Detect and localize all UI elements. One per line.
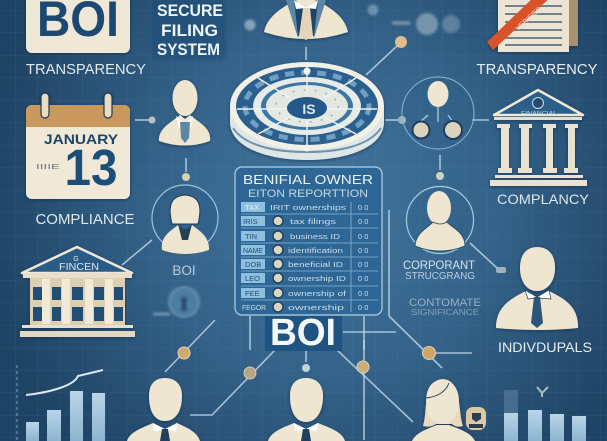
label: transparency left: TRANSPARENCY: [26, 61, 146, 78]
table: report rows: ownership: [288, 303, 344, 312]
icon: individual person: [496, 247, 578, 330]
icon: faded small dot top: [244, 20, 256, 30]
table: report rows: 0 0: [358, 217, 368, 226]
table: report rows: NAME: [243, 246, 263, 255]
icon: connector dot left: [148, 116, 156, 124]
icon: connector dot upper right: [436, 172, 444, 180]
label: transparency right: TRANSPARENCY: [476, 61, 598, 78]
icon: person in circle: [406, 186, 474, 254]
heading: secure filing system: [152, 0, 226, 60]
table: report rows: 0 0: [358, 232, 368, 241]
icon: faded shield top: [368, 4, 378, 16]
label: BOI small: BOI: [172, 263, 196, 278]
icon: calendar January 13: [26, 93, 130, 199]
label: individuals: INDIVDUPALS: [498, 339, 592, 355]
label: BOI large: BOI: [270, 312, 336, 354]
icon: person bottom left: [127, 378, 200, 441]
icon: FinCEN building: [20, 247, 135, 337]
icon: person bottom centre: [268, 378, 345, 441]
icon: faded lock: [153, 287, 199, 317]
table: report rows: [241, 202, 378, 312]
icon: FinCEN building: FINCEN: [59, 261, 99, 273]
label: faded corporate: CONTOMATE: [409, 297, 481, 309]
heading: secure filing system: SECURE: [157, 2, 223, 20]
label: compliance left: COMPLIANCE: [36, 212, 135, 228]
table: report rows: 0 0: [358, 289, 368, 298]
heading: reporting: EITON REPORTTION: [248, 188, 368, 200]
icon: tan node bottom right: [357, 361, 369, 373]
table: report rows: identification: [288, 246, 343, 255]
table: report rows: TIN: [245, 232, 257, 241]
panel: beneficial owner report: [235, 167, 382, 315]
icon: corporate ownership circle: [402, 77, 474, 149]
table: report rows: LEO: [245, 274, 260, 283]
icon: connector dot upper middle left: [182, 173, 190, 181]
icon: bank building right: FINANCIAL: [521, 111, 557, 117]
table: report rows: ownership of: [288, 289, 347, 298]
table: report rows: 0 0: [358, 246, 368, 255]
label: corporate structure: STRUCGRANG: [405, 271, 475, 282]
icon: faded dot by disc: [398, 116, 406, 124]
icon: calendar January 13: JANUARY: [44, 131, 119, 147]
label: compliancy right: COMPLANCY: [497, 191, 590, 207]
icon: document with ribbon: VERIFIED: [515, 6, 543, 32]
label: corporate structure: CORPORANT: [403, 260, 475, 272]
table: report rows: 0 0: [358, 303, 368, 312]
heading: benifial owner: BENIFIAL OWNER: [243, 173, 373, 187]
icon: document with ribbon: [487, 0, 578, 52]
label: faded corporate: SIGNIFICANCE: [411, 308, 479, 317]
icon: badge: [466, 407, 486, 430]
icon: calendar January 13: 13: [64, 139, 118, 196]
icon: FinCEN building: G: [73, 256, 79, 263]
table: report rows: 0 0: [358, 203, 368, 212]
disc: secure filing system: [230, 62, 384, 160]
table: report rows: TAX: [245, 203, 259, 212]
icon: tan node right: [422, 346, 436, 360]
table: report rows: beneficial ID: [288, 260, 344, 269]
chart: bars bottom right: [504, 387, 586, 441]
disc: secure filing system: IS: [302, 101, 316, 117]
table: report rows: DOB: [245, 260, 261, 269]
table: report rows: ownership ID: [288, 274, 347, 283]
table: report rows: 0 0: [358, 260, 368, 269]
label: corporate structure: [403, 260, 475, 282]
chart: bars bottom left: [17, 365, 105, 441]
table: report rows: business ID: [290, 232, 341, 241]
table: report rows: FEE: [245, 289, 260, 298]
icon: tan node lower left: [178, 347, 190, 359]
icon: person top left: [159, 80, 210, 146]
icon: faded blob: [496, 267, 506, 273]
icon: calendar January 13: IIIIE: [36, 164, 61, 171]
table: report rows: tax filings: [290, 217, 336, 226]
heading: secure filing system: FILING: [161, 22, 218, 40]
icon: connector dot bottom centre: [302, 364, 310, 372]
table: report rows: 0 0: [358, 274, 368, 283]
icon: woman bottom: [412, 379, 475, 441]
icon: top person: [264, 0, 348, 40]
table: report rows: IRIS: [243, 217, 258, 226]
heading: secure filing system: SYSTEM: [157, 41, 220, 59]
icon: faded circles top right: [392, 13, 460, 35]
label: faded corporate: [409, 297, 481, 317]
icon: tan node top: [395, 36, 407, 48]
icon: bank building right: [490, 90, 587, 186]
table: report rows: FEGOR: [242, 303, 267, 312]
icon: tan node bottom: [244, 367, 256, 379]
table: report rows: IRIT ownerships: [270, 203, 346, 212]
icon: woman in circle: [152, 185, 218, 254]
